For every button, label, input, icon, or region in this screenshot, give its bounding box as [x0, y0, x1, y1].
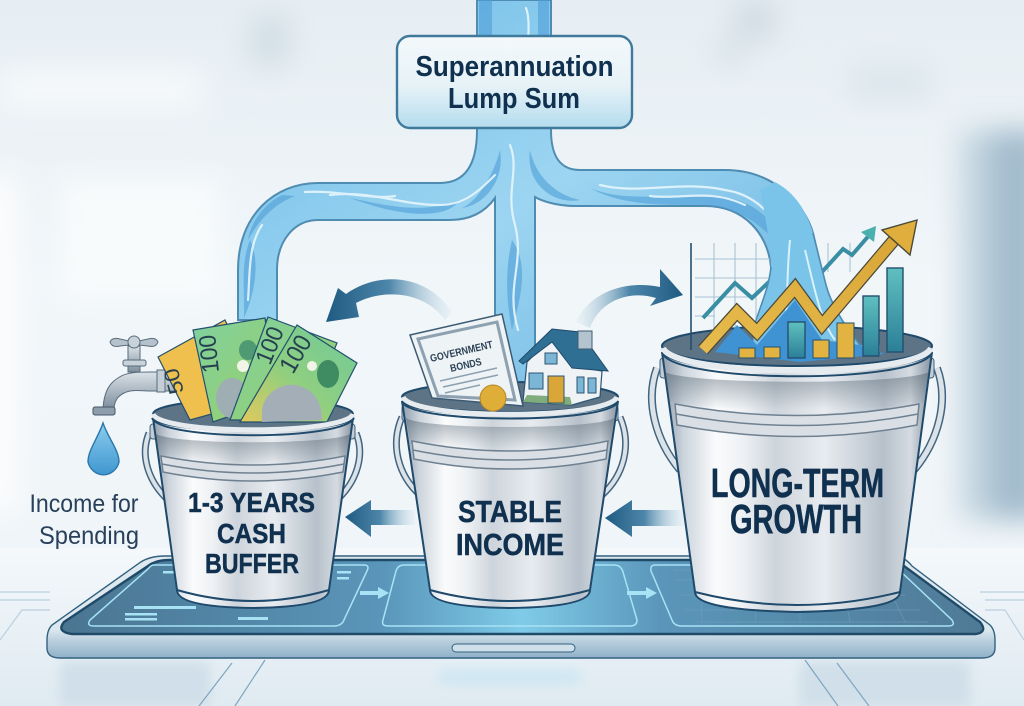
government bonds certificate: GOVERNMENT — [429, 339, 495, 365]
government bonds certificate: BONDS — [449, 356, 483, 375]
title box: Superannuation — [416, 51, 614, 83]
caption: income for spending: Income for — [30, 490, 138, 518]
arrow: curved to cash buffer — [326, 279, 452, 322]
bucket: stable income — [396, 314, 626, 608]
banknotes: 100 — [274, 330, 318, 378]
government bonds certificate — [410, 314, 523, 411]
banknotes: 100 — [251, 323, 290, 368]
house — [519, 329, 608, 405]
bucket: cash buffer: CASH — [217, 518, 286, 549]
arrow: curved to growth — [576, 269, 683, 328]
arrow: stable income to cash buffer — [345, 500, 415, 537]
bucket: stable income: STABLE — [458, 494, 562, 529]
title box — [397, 36, 632, 128]
tablet home button — [452, 644, 575, 652]
bucket: long-term growth: LONG-TERM — [711, 460, 884, 506]
title box: Lump Sum — [448, 83, 580, 115]
banknotes: 100 — [194, 334, 225, 374]
banknotes — [158, 317, 357, 422]
bucket: cash buffer — [145, 317, 360, 608]
tablet platform — [47, 556, 995, 658]
bucket: cash buffer: 1-3 YEARS — [188, 487, 315, 518]
icon: tap — [93, 336, 178, 415]
bucket: long-term growth — [652, 182, 942, 612]
arrow: long-term growth to stable income — [605, 500, 684, 537]
bucket: cash buffer: BUFFER — [205, 548, 299, 579]
bucket: stable income: INCOME — [456, 527, 564, 562]
bucket: long-term growth: GROWTH — [730, 496, 862, 542]
banknotes: 50 — [160, 366, 189, 397]
icon: water drop — [88, 423, 119, 475]
water stream — [238, 0, 826, 400]
caption: income for spending — [30, 490, 139, 550]
caption: income for spending: Spending — [39, 522, 139, 550]
growth chart — [691, 182, 917, 362]
